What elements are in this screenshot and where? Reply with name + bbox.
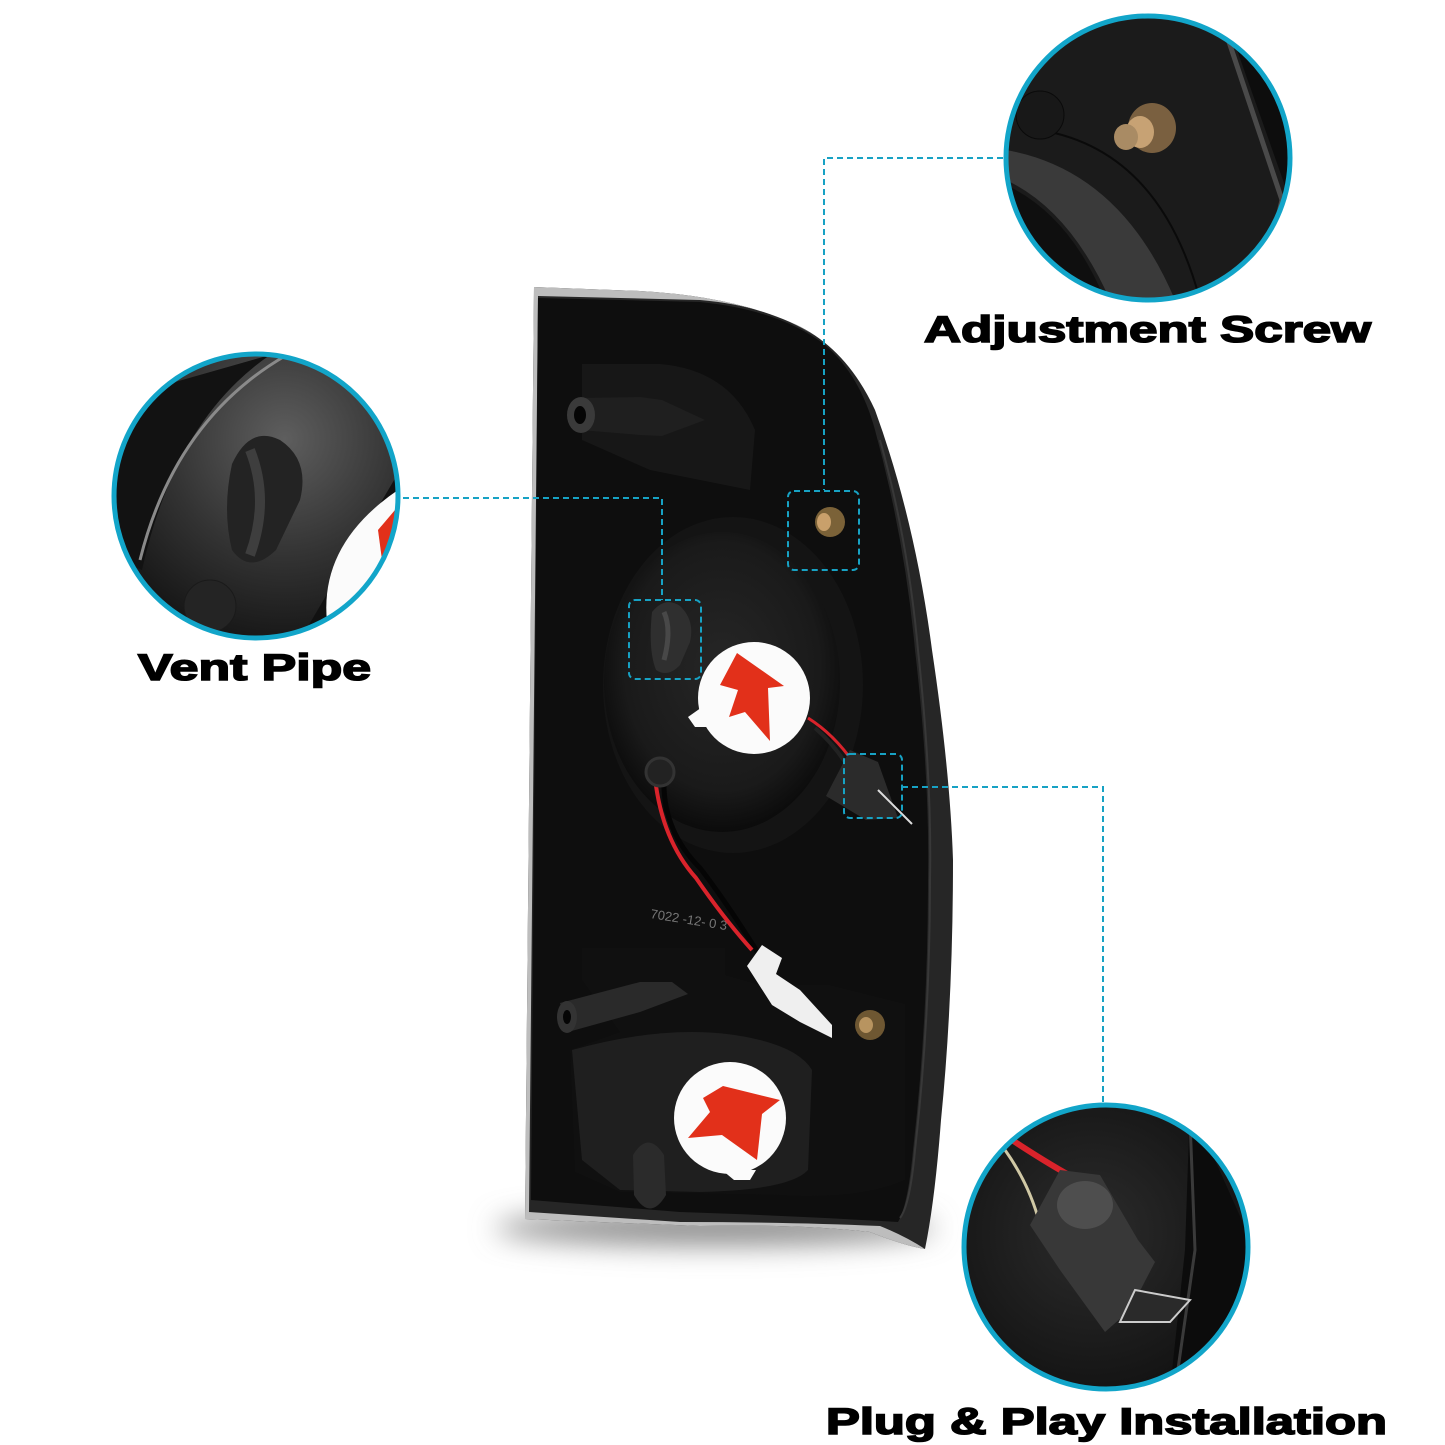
callout frame: plug marker — [844, 754, 902, 818]
lower vent cap — [633, 1142, 666, 1208]
small vent pipe on socket — [651, 602, 691, 673]
leader line: vent pipe — [403, 498, 662, 600]
callout frame: vent pipe marker — [629, 600, 701, 679]
white label with red arrow — [688, 642, 810, 754]
lower socket block — [570, 948, 905, 1196]
label: plug and play installation: Plug & Play Installation — [826, 1401, 1387, 1442]
callout frame: adjustment screw marker — [788, 491, 859, 570]
detail circle: adjustment screw — [1006, 16, 1300, 300]
label: vent pipe: Vent Pipe — [138, 647, 371, 688]
brass adjustment screw — [815, 507, 845, 537]
upper vent tube — [567, 397, 705, 436]
lower white label with red arrow — [674, 1062, 786, 1180]
product: tail light housing — [495, 287, 953, 1249]
leader line: adjustment screw — [824, 158, 1003, 490]
lower vent tube — [557, 982, 688, 1033]
upper bulb socket — [582, 364, 755, 490]
leader line: plug and play — [902, 787, 1103, 1104]
label: adjustment screw: Adjustment Screw — [924, 309, 1371, 350]
wires on socket — [646, 718, 855, 956]
detail circle: vent pipe — [112, 354, 405, 660]
date code: 7022 -12- 0 3 — [650, 906, 728, 933]
lower brass screw — [855, 1010, 885, 1040]
wire connector black — [826, 750, 912, 824]
white connector — [747, 945, 832, 1038]
main round socket — [603, 517, 863, 853]
detail circle: plug connector — [964, 1104, 1255, 1390]
